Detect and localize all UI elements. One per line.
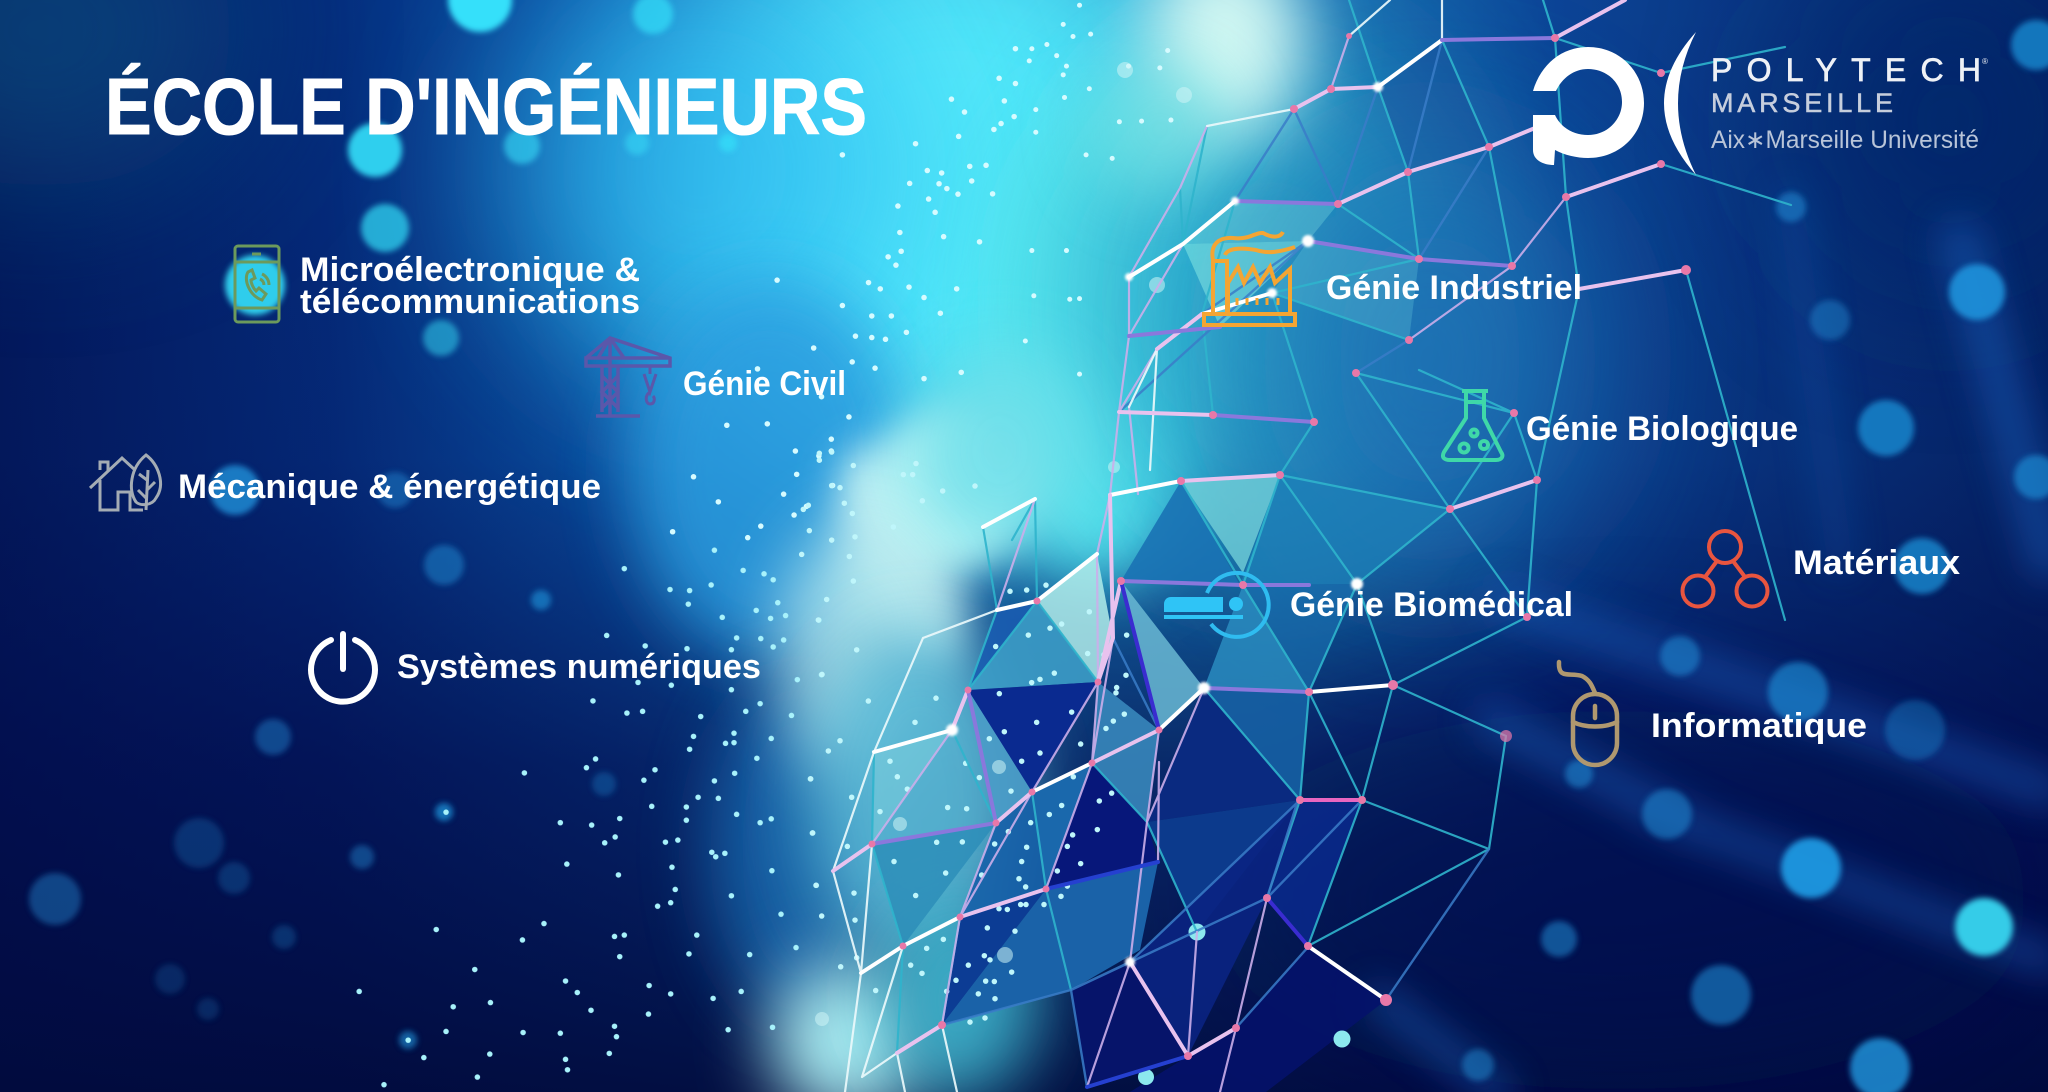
label: Microélectronique & bbox=[300, 251, 640, 289]
logo text: MARSEILLE bbox=[1711, 88, 1893, 118]
item: Génie Civil bbox=[586, 338, 846, 416]
label line 2: télécommunications bbox=[300, 283, 640, 321]
logo parenthesis bbox=[1664, 32, 1696, 175]
icon: power bbox=[311, 634, 375, 702]
icon: crane bbox=[586, 338, 670, 416]
item: Informatique bbox=[1559, 662, 1867, 765]
mesh facets bbox=[872, 40, 1489, 1092]
logo: Polytech Marseille bbox=[1533, 32, 1988, 175]
logo text: Aix∗Marseille Université bbox=[1711, 126, 1979, 154]
item: Génie Biologique bbox=[1443, 391, 1798, 460]
icon: factory bbox=[1204, 232, 1295, 325]
label: Informatique bbox=[1651, 707, 1867, 745]
thin blue mesh lines bbox=[942, 40, 1489, 1087]
particle field bbox=[359, 5, 1350, 1085]
polygon network mesh bbox=[833, 0, 1791, 1092]
title: ÉCOLE D'INGÉNIEURS bbox=[105, 62, 867, 151]
logo text: POLYTECH bbox=[1711, 52, 1981, 88]
item: Matériaux bbox=[1682, 531, 1960, 606]
label: Génie Biomédical bbox=[1290, 586, 1573, 624]
logo text bbox=[1711, 52, 1988, 154]
mesh nodes bbox=[868, 33, 1691, 1060]
background light streaks bbox=[1380, 200, 2048, 1092]
label: Génie Biologique bbox=[1526, 410, 1798, 448]
thin lavender mesh lines bbox=[872, 36, 1566, 1092]
label: Systèmes numériques bbox=[397, 648, 761, 686]
label: Génie Industriel bbox=[1326, 269, 1582, 307]
icon: flask bbox=[1443, 391, 1502, 460]
item: Systèmes numériques bbox=[311, 634, 761, 702]
icon: mouse bbox=[1559, 662, 1617, 765]
icon: house and leaf bbox=[90, 455, 161, 510]
item: Microélectronique & télécommunications bbox=[235, 246, 640, 322]
logo text: ® bbox=[1982, 57, 1988, 66]
thick pink mesh lines bbox=[833, 0, 1686, 1056]
thick purple mesh lines bbox=[872, 38, 1555, 844]
logo symbol bbox=[1533, 47, 1644, 165]
mesh sparkles bbox=[946, 82, 1383, 967]
thin white mesh lines bbox=[833, 0, 1442, 1092]
label: Matériaux bbox=[1793, 544, 1960, 582]
label: Génie Civil bbox=[683, 365, 846, 403]
thin teal mesh lines bbox=[872, 0, 1791, 1053]
label: Mécanique & énergétique bbox=[178, 468, 601, 506]
item: Génie Industriel bbox=[1204, 232, 1582, 325]
icon: molecule bbox=[1682, 531, 1768, 606]
item: Mécanique & énergétique bbox=[90, 455, 601, 510]
icon: scanner bbox=[1164, 573, 1269, 637]
icon: smartphone bbox=[235, 246, 279, 322]
thick white mesh lines bbox=[861, 40, 1442, 1000]
item: Génie Biomédical bbox=[1164, 573, 1573, 637]
